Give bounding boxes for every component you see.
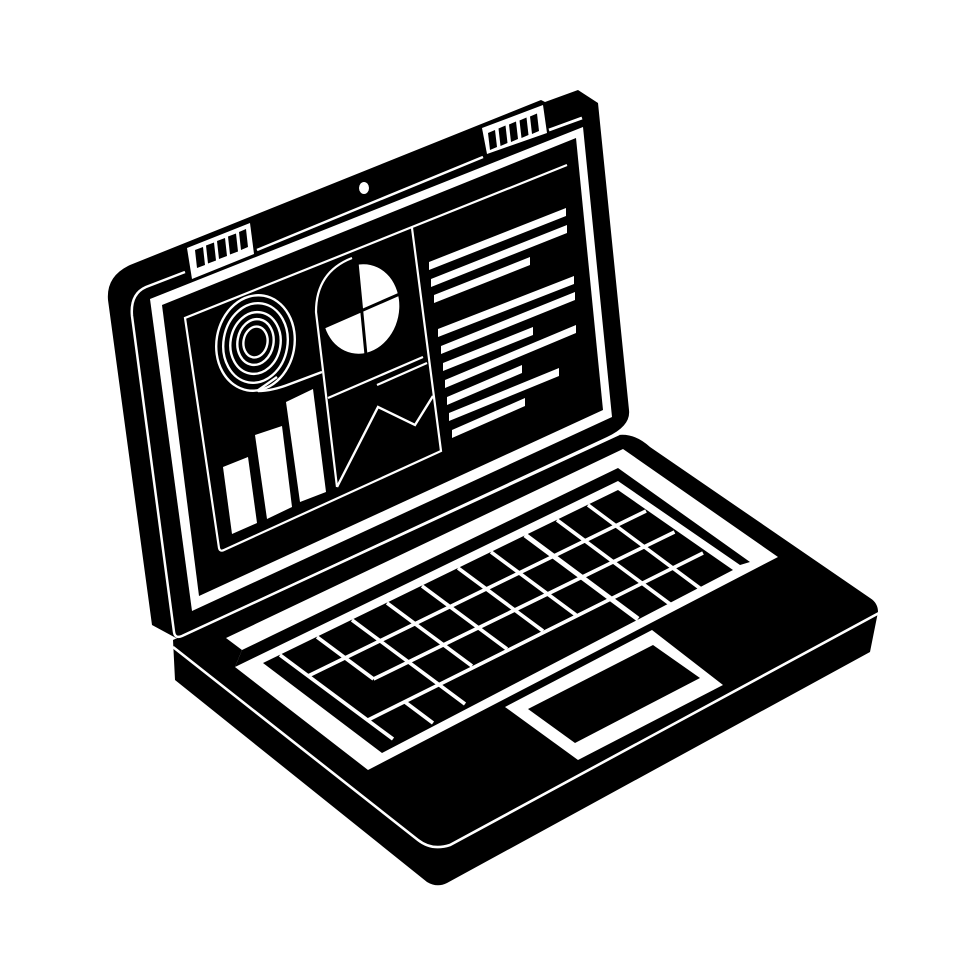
bar chart — [223, 389, 326, 534]
middle panel outline — [316, 258, 352, 487]
lid hinge line — [132, 272, 619, 637]
base edge line — [173, 613, 879, 847]
lid body — [108, 90, 629, 638]
base body — [173, 435, 878, 885]
text lines — [429, 208, 576, 438]
screen — [162, 138, 603, 596]
screen bezel — [150, 127, 612, 611]
key bed — [263, 490, 733, 753]
laptop lid — [108, 90, 629, 638]
keyboard frame — [226, 449, 778, 770]
pie chart — [310, 257, 408, 361]
fingerprint chart — [209, 289, 322, 397]
trackpad frame — [505, 630, 723, 760]
keyboard upper stripe — [235, 468, 750, 667]
trackpad surface — [528, 645, 700, 743]
dashboard outline — [185, 165, 567, 551]
line chart — [337, 396, 433, 487]
tab plate — [482, 105, 547, 154]
lid top line left — [257, 157, 483, 250]
laptop base — [173, 435, 879, 885]
right hinge tab — [482, 105, 547, 154]
dashboard on screen — [185, 165, 576, 551]
left hinge tab — [187, 223, 254, 279]
tab slots — [195, 229, 248, 268]
keyboard keys — [263, 490, 733, 753]
icon: webcam — [359, 182, 369, 194]
tab plate — [187, 223, 254, 279]
tab slots — [488, 114, 539, 150]
panel divider lines — [328, 357, 427, 398]
lid top line right — [549, 118, 582, 130]
trackpad — [505, 630, 723, 760]
key grid lines — [280, 505, 703, 739]
